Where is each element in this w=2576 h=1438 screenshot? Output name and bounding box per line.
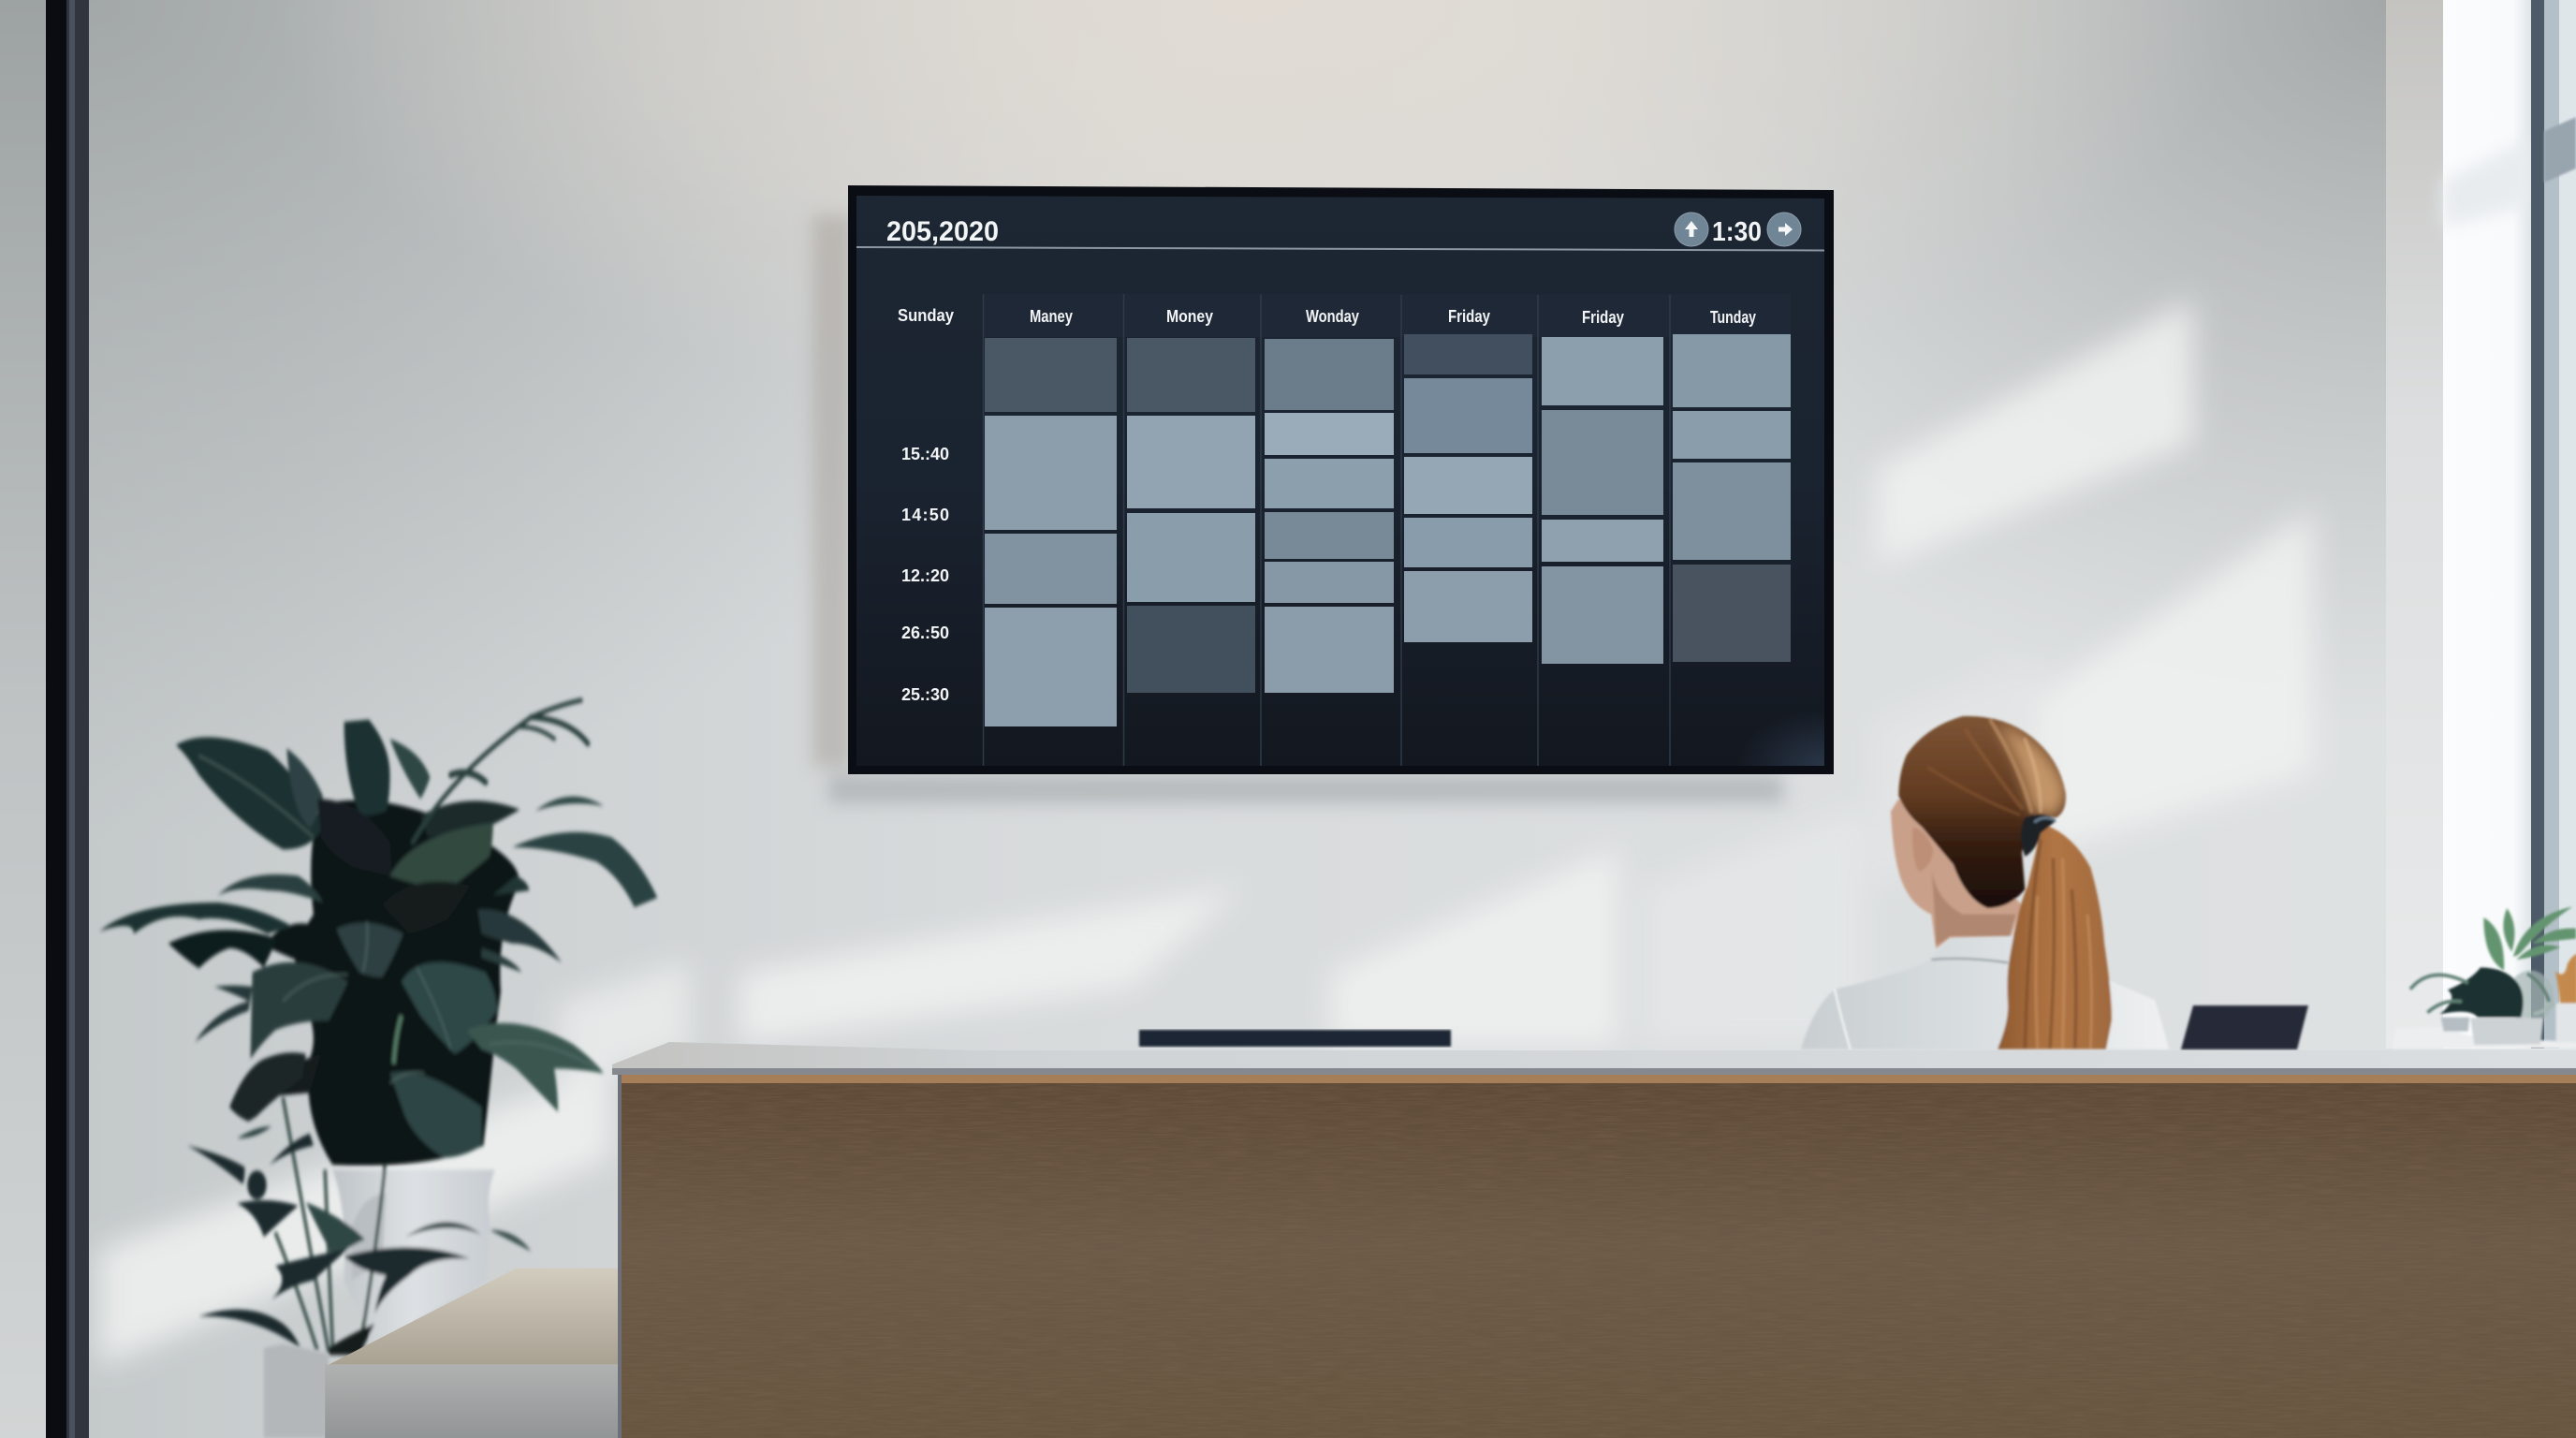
- tall green leaves: [2483, 906, 2576, 971]
- schedule column 3: [1265, 339, 1394, 693]
- time axis labels: 26.:50: [901, 624, 949, 642]
- schedule column 6: [1673, 334, 1791, 662]
- day column headers: Money: [1166, 307, 1213, 326]
- schedule column 4: [1404, 334, 1532, 642]
- time axis labels: 25.:30: [901, 685, 949, 704]
- time axis labels: 14:50: [901, 506, 949, 524]
- leaf veins: [198, 756, 596, 1083]
- header: clock: 1:30: [1712, 217, 1762, 247]
- lower plant leaves: [187, 1126, 532, 1355]
- day column headers: Friday: [1448, 307, 1490, 326]
- time axis labels: Sunday: [898, 306, 954, 325]
- window sill: [2392, 1027, 2576, 1049]
- time axis labels: [898, 306, 954, 704]
- monitor edge on desk: [1139, 1030, 1451, 1047]
- door frame left: [46, 0, 89, 1438]
- beige side block: [325, 1269, 620, 1438]
- desk top edge: [612, 1068, 2576, 1075]
- sunlight patches on wall: [98, 299, 2313, 1367]
- dark leaves: [2440, 967, 2524, 1018]
- hair on head: [1898, 716, 2066, 908]
- palm frond top right: [413, 700, 588, 843]
- schedule column 5: [1542, 337, 1663, 664]
- back pot: [2441, 1018, 2469, 1032]
- day column headers: Maney: [1030, 307, 1073, 326]
- time axis labels: 15.:40: [901, 445, 949, 463]
- time axis labels: 12.:20: [901, 566, 949, 585]
- foliage back layer: [99, 720, 657, 1042]
- grey fronds: [2507, 971, 2554, 1023]
- lower plant stems: [275, 1016, 402, 1353]
- lower plant pot: [264, 1343, 329, 1438]
- dark foliage core: [260, 800, 520, 1166]
- tablet on desk: [2181, 1005, 2308, 1049]
- upper plant pot: [332, 1169, 495, 1345]
- wood top trim: [622, 1075, 2576, 1083]
- day column headers: Wonday: [1306, 307, 1359, 326]
- TV wall shadow: [812, 215, 1783, 803]
- orange leaves and cup: [2555, 953, 2576, 1004]
- column rules: [983, 294, 1670, 766]
- header: up arrow button: [1675, 213, 1708, 246]
- hair tie: [2021, 814, 2056, 857]
- hair highlights: [1928, 721, 2067, 819]
- day column headers: [1030, 307, 1756, 327]
- header rule: [856, 247, 1824, 251]
- TV bezel: [848, 185, 1834, 774]
- ponytail: [1998, 824, 2112, 1049]
- wood front panel: [622, 1083, 2576, 1438]
- wall-mounted TV display: [848, 185, 1834, 774]
- neck and face: [1891, 799, 2022, 948]
- white shirt: [1801, 936, 2169, 1049]
- white pot: [2470, 1018, 2543, 1045]
- header: right arrow button: [1767, 213, 1801, 246]
- window: [2443, 0, 2576, 1049]
- header: date: 205,2020: [886, 216, 999, 247]
- receptionist seen from behind: [1801, 716, 2169, 1049]
- day column headers: Friday: [1582, 308, 1624, 327]
- reception desk: [612, 1042, 2576, 1438]
- foliage front layer: [198, 756, 604, 1157]
- day column headers: Tunday: [1710, 308, 1756, 327]
- ear: [1912, 827, 1933, 873]
- TV screen: [856, 196, 1824, 766]
- right pillar: [2386, 0, 2443, 1049]
- small plant on sill: [2392, 906, 2576, 1049]
- schedule column 2: [1127, 338, 1255, 693]
- large potted plant: [99, 700, 657, 1355]
- left wall strip: [0, 0, 46, 1438]
- schedule column 1: [985, 338, 1117, 726]
- desk top surface: [612, 1042, 2576, 1070]
